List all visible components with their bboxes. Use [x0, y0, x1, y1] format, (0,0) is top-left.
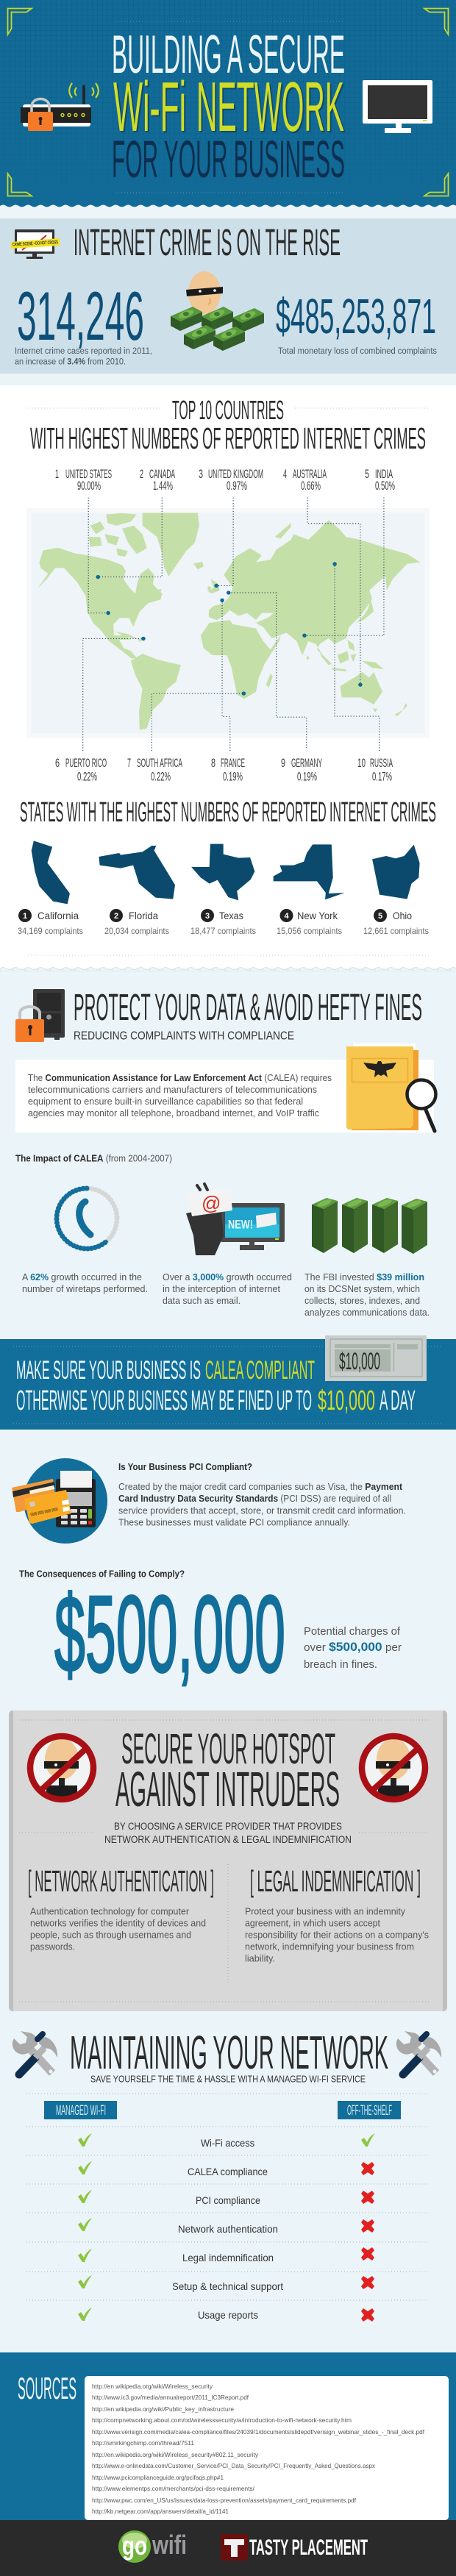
icon: hand with email and monitor: NEW!: [228, 1218, 253, 1231]
stat: interception: in the interception of internet: [163, 1283, 280, 1294]
CALEA panel: The Communication Assistance for Law Enforcement Act (CALEA) requires: [28, 1073, 332, 1083]
state 5 ohio: 12,661 complaints: [363, 926, 429, 936]
stat: interception: Over a 3,000% growth occurred: [163, 1271, 292, 1282]
stat: monetary loss: Total monetary loss of combined complaints: [278, 347, 437, 356]
row: pci compliance: [78, 2190, 374, 2206]
banner text: CALEA COMPLIANT: [205, 1356, 315, 1385]
state 1 california: 34,169 complaints: [18, 926, 83, 936]
subheading: SAVE YOURSELF THE TIME & HASSLE WITH A MANAGED WI-FI SERVICE: [90, 2074, 366, 2084]
tag: managed wi-fi: [44, 2101, 117, 2119]
icon: monitor: [363, 80, 432, 133]
corner brackets: [7, 9, 449, 196]
stat: wiretaps: A 62% growth occurred in the: [22, 1271, 142, 1282]
country labels: UNITED STATES: [65, 467, 112, 481]
state 1 california: 1: [23, 912, 27, 921]
icon: check: $10,000: [339, 1348, 380, 1374]
logo: go wifi: wifi: [152, 2530, 187, 2560]
banner text: [16, 1356, 416, 1416]
panel: PCI compliance: [12, 1458, 406, 1695]
state 2 florida: [104, 909, 169, 936]
icon: check: [325, 1335, 427, 1381]
banner text: MAKE SURE YOUR BUSINESS IS: [16, 1356, 201, 1385]
state 2 florida: Florida: [129, 910, 158, 921]
country labels: 9: [281, 756, 285, 770]
row: legal indemnification: [78, 2247, 374, 2263]
stat: FBI: collects, stores, indexes, and: [304, 1295, 420, 1306]
country labels: FRANCE: [221, 756, 245, 770]
PCI text: Card Industry Data Security Standards (PCI DSS) are required of all: [118, 1494, 391, 1504]
state 4 new york: 4: [284, 912, 289, 921]
icon: thief with money: [171, 271, 264, 351]
column: network authentication: [28, 1864, 214, 1952]
country labels: 0.97%: [227, 479, 247, 493]
sources list: http://en.wikipedia.org/wiki/Wireless_security: [92, 2383, 213, 2390]
panel: sources: SOURCES: [18, 2371, 76, 2405]
icon: no intruder left: [30, 1736, 93, 1800]
row: network authentication: Network authentication: [178, 2223, 278, 2235]
country labels: UNITED KINGDOM: [208, 467, 263, 481]
column: legal indemnification: [245, 1864, 429, 1963]
fine caption: Potential charges of: [304, 1625, 401, 1638]
country labels: 0.66%: [301, 479, 321, 493]
state 1 california: California: [38, 910, 79, 921]
panel: CALEA banner: [0, 1335, 456, 1430]
country labels: AUSTRALIA: [293, 467, 327, 481]
icon: safe with padlock: [15, 989, 65, 1042]
icon: crime scene monitor: CRIME SCENE • DO NOT CROSS: [13, 240, 58, 247]
stat: cases: 314,246: [17, 277, 144, 354]
stat: interception: data such as email.: [163, 1295, 241, 1306]
country labels: SOUTH AFRICA: [137, 756, 182, 770]
wave divider: [0, 966, 456, 971]
row: pci compliance: PCI compliance: [196, 2194, 260, 2206]
country labels: 7: [127, 756, 131, 770]
sources list: http://www.pwc.com/en_US/us/issues/data-loss-prevention/assets/payment_card_requirements.pdf: [92, 2497, 357, 2504]
sources list: http://smirkingchimp.com/thread/7511: [92, 2439, 194, 2447]
icon: no intruder right: [362, 1736, 425, 1800]
icon: card terminal: 0000 0000 0000 0000: [30, 1507, 59, 1518]
country labels: 5: [365, 467, 369, 481]
subheading: [104, 1821, 352, 1845]
logo: go wifi: go: [122, 2530, 147, 2561]
country labels: GERMANY: [291, 756, 322, 770]
state 2 florida: 20,034 complaints: [104, 926, 169, 936]
world map: [32, 498, 424, 751]
subheading: NETWORK AUTHENTICATION & LEGAL INDEMNIFICATION: [104, 1834, 352, 1845]
icon: hand with email and monitor: @: [202, 1192, 221, 1214]
sources list: http://en.wikipedia.org/wiki/Public_key_infrastructure: [92, 2405, 234, 2413]
tag: managed wi-fi: MANAGED WI-FI: [56, 2103, 106, 2119]
row: wi-fi access: Wi-Fi access: [201, 2137, 254, 2149]
consequences heading: The Consequences of Failing to Comply?: [19, 1569, 185, 1580]
icon: wiretap phone ring: [57, 1188, 117, 1249]
banner text: $10,000: [318, 1385, 375, 1416]
state 5 ohio: [363, 909, 429, 936]
heading: [26, 395, 430, 455]
location dots: [96, 562, 363, 696]
icon: card terminal: [12, 1458, 107, 1544]
state 3 texas: [190, 909, 256, 936]
row: usage reports: [78, 2308, 374, 2322]
PCI text: Created by the major credit card companies such as Visa, the Payment: [118, 1482, 403, 1492]
state 1 california: [18, 909, 83, 936]
stat: cases: [15, 277, 152, 366]
country labels: 0.17%: [372, 769, 392, 784]
state 3 texas: 3: [205, 912, 210, 921]
state 4 new york: [277, 909, 342, 936]
row: setup and support: [78, 2275, 374, 2292]
state 2 florida: 2: [114, 912, 118, 921]
icon: folder with magnifier: [346, 1043, 435, 1131]
row: calea compliance: CALEA compliance: [188, 2166, 268, 2177]
PCI text: Is Your Business PCI Compliant?: [118, 1462, 252, 1472]
state 5 ohio: 5: [378, 912, 382, 921]
impact heading: The Impact of CALEA (from 2004-2007): [15, 1153, 172, 1163]
sources list: http://en.wikipedia.org/wiki/Wireless_security#802.11_security: [92, 2451, 259, 2458]
icon: crime scene monitor: [11, 229, 60, 259]
country labels: [55, 467, 395, 784]
country labels: RUSSIA: [370, 756, 393, 770]
state 5 ohio: Ohio: [393, 910, 412, 921]
fine caption: [304, 1625, 402, 1671]
map frame: [26, 508, 430, 738]
fine caption: over $500,000 per: [304, 1640, 402, 1654]
stat: cases: an increase of 3.4% from 2010.: [15, 357, 126, 366]
CALEA panel: agencies may monitor all telephone, broadband internet, and VoIP traffic: [28, 1108, 319, 1118]
column: network authentication: networks verifies the identity of devices and: [30, 1918, 206, 1928]
state 4 new york: New York: [297, 910, 338, 921]
country labels: 10: [357, 756, 366, 770]
subheading: REDUCING COMPLAINTS WITH COMPLIANCE: [74, 1030, 294, 1043]
country labels: 0.19%: [223, 769, 243, 784]
stat: FBI: analyzes communications data.: [304, 1307, 430, 1318]
column: network authentication: people, such as through usernames and: [30, 1930, 191, 1940]
country labels: 6: [55, 756, 60, 770]
CALEA panel: telecommunications carriers and manufacturers of telecommunications: [28, 1085, 317, 1095]
column: network authentication: passwords.: [30, 1941, 75, 1952]
icon: tools right: [396, 2031, 441, 2074]
country labels: 3: [199, 467, 203, 481]
state 4 new york: 15,056 complaints: [277, 926, 342, 936]
country labels: CANADA: [149, 467, 175, 481]
icon: hand with email and monitor: [186, 1184, 285, 1255]
PCI text: These businesses must validate PCI compliance annually.: [118, 1518, 350, 1528]
state silhouettes: [32, 841, 420, 904]
column: legal indemnification: agreement, in which users accept: [245, 1918, 381, 1928]
wave divider: [0, 203, 456, 209]
column: legal indemnification: responsibility for their actions on a company's: [245, 1930, 429, 1940]
country labels: 0.19%: [297, 769, 317, 784]
state 3 texas: Texas: [219, 910, 243, 921]
row: calea compliance: [78, 2161, 374, 2177]
stat: cases: Internet crime cases reported in 2011,: [15, 347, 152, 356]
title: [112, 25, 345, 189]
row: legal indemnification: Legal indemnification: [182, 2252, 274, 2263]
sources list: http://www.e-onlinedata.com/Customer_Service/PCI_Data_Security/PCI_Frequently_Asked_Questions.aspx: [92, 2462, 376, 2469]
fine caption: breach in fines.: [304, 1658, 377, 1671]
stat: wiretaps: number of wiretaps performed.: [22, 1283, 148, 1294]
column: legal indemnification: liability.: [245, 1953, 275, 1963]
PCI text: service providers that accept, store, or transmit credit card information.: [118, 1506, 406, 1516]
sources list: http://www.verisign.com/media/calea-compliance/files/24039/1/documents/slidepdf/verisign_webinar_slides_-_final_deck.pdf: [92, 2428, 425, 2436]
sources list: http://kb.netgear.com/app/answers/detail/a_id/1141: [92, 2508, 229, 2515]
subheading: BY CHOOSING A SERVICE PROVIDER THAT PROVIDES: [114, 1821, 342, 1832]
row: wi-fi access: [78, 2133, 375, 2149]
panel: footer: [0, 2520, 456, 2576]
stat: interception: [163, 1271, 292, 1306]
icon: tools left: [13, 2031, 57, 2074]
icon: router with padlock: [21, 83, 99, 131]
logo: tasty placement: [221, 2534, 368, 2561]
sources list: http://www.pcicomplianceguide.org/pcifaqs.php#1: [92, 2474, 224, 2481]
country labels: INDIA: [375, 467, 393, 481]
sources list: http://www.elementps.com/merchants/pci-dss-requirements/: [92, 2485, 255, 2492]
sources list: [85, 2376, 449, 2520]
header panel: [0, 0, 456, 207]
tag: off-the-shelf: [338, 2101, 401, 2119]
row: network authentication: [78, 2218, 374, 2235]
stat: FBI: The FBI invested $39 million: [304, 1271, 424, 1282]
heading: [115, 1725, 340, 1817]
country labels: 0.22%: [77, 769, 97, 784]
panel: sources: [0, 2352, 456, 2520]
icon: money stacks: [312, 1198, 427, 1254]
panel: internet crime: [0, 218, 456, 385]
sources list: http://compnetworking.about.com/od/wirelesssecurity/a/introduction-to-wifi-network-security.htm: [92, 2416, 352, 2424]
CALEA panel: equipment to ensure built-in surveillance capabilities so that federal: [28, 1096, 303, 1107]
panel: maintaining your network: [13, 2026, 441, 2322]
row: usage reports: Usage reports: [198, 2309, 258, 2321]
state 3 texas: 18,477 complaints: [190, 926, 256, 936]
country labels: 1.44%: [153, 479, 173, 493]
row: setup and support: Setup & technical support: [172, 2280, 283, 2292]
stat: FBI: [304, 1271, 430, 1318]
heading: TOP 10 COUNTRIES: [172, 395, 284, 425]
panel: protect your data: [15, 986, 435, 1318]
country labels: 8: [211, 756, 215, 770]
country labels: 90.00%: [77, 479, 101, 493]
country labels: 2: [140, 467, 143, 481]
country labels: PUERTO RICO: [65, 756, 107, 770]
title: Wi-Fi: [113, 68, 186, 146]
logo: go wifi: [118, 2530, 187, 2563]
panel: maintaining your network: OFF-THE-SHELF: [347, 2103, 392, 2119]
panel: top 10 countries: [0, 385, 456, 968]
stat: FBI: on its DCSNet system, which: [304, 1283, 420, 1294]
light band: [0, 208, 456, 218]
column: network authentication: Authentication technology for computer: [30, 1906, 189, 1916]
PCI text: [118, 1462, 406, 1528]
stat: wiretaps: [22, 1271, 148, 1294]
country labels: 0.50%: [375, 479, 395, 493]
leader lines: [83, 498, 384, 751]
column: legal indemnification: Protect your business with an indemnity: [245, 1906, 406, 1916]
sources list: http://www.ic3.gov/media/annualreport/2011_IC3Report.pdf: [92, 2394, 249, 2401]
column: legal indemnification: network, indemnifying your business from: [245, 1941, 414, 1952]
country labels: 0.22%: [151, 769, 171, 784]
CALEA panel: [15, 1060, 434, 1132]
panel: secure your hotspot: [9, 1710, 447, 2011]
country labels: 4: [283, 467, 287, 481]
country labels: 1: [55, 467, 59, 481]
